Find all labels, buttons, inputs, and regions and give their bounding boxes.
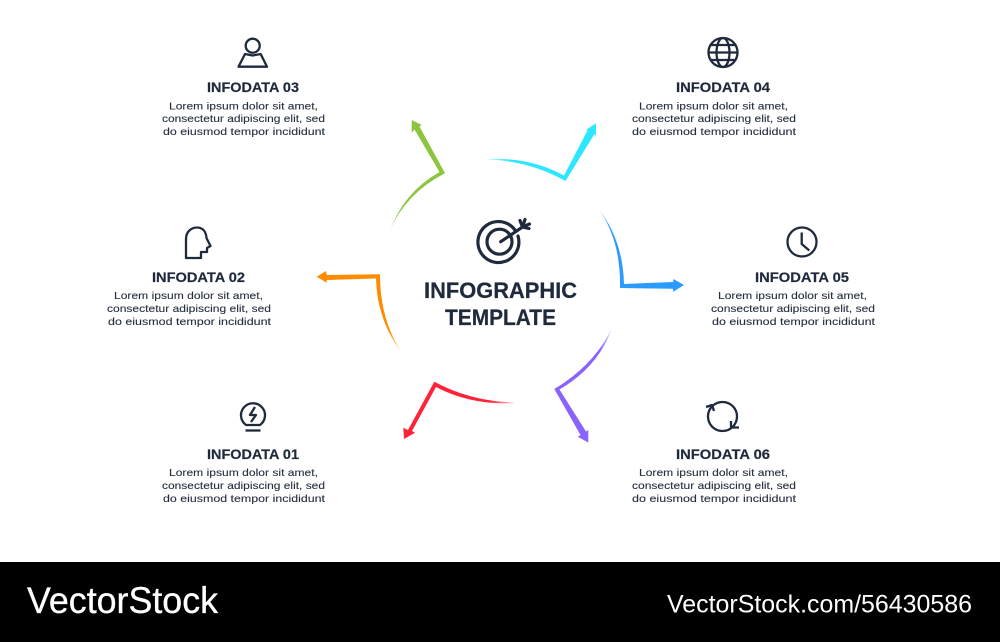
text block: infodata 06: consectetur adipiscing elit, sed <box>632 480 796 492</box>
heading: infodata 04: INFODATA 04 <box>676 80 771 95</box>
icon: clock <box>788 228 816 256</box>
text block: infodata 01 <box>162 467 325 505</box>
panel: infodata 03 <box>162 39 325 138</box>
arrow: purple to Infodata 06 <box>554 329 612 442</box>
heading: infodata 01: INFODATA 01 <box>207 447 300 462</box>
arrow: blue to Infodata 05 <box>598 208 684 292</box>
text block: infodata 04 <box>632 100 796 138</box>
text block: infodata 02: consectetur adipiscing elit, sed <box>107 303 271 315</box>
footer bar with watermark <box>0 562 1000 642</box>
text block: infodata 05: Lorem ipsum dolor sit amet, <box>718 290 867 302</box>
panel: infodata 06 <box>632 402 796 505</box>
footer url text: VectorStock.com/56430586 <box>667 590 972 618</box>
heading: infodata 06: INFODATA 06 <box>676 447 771 462</box>
center: target icon and title <box>424 220 577 330</box>
arrow: red to Infodata 01 <box>403 382 514 439</box>
text block: infodata 02 <box>107 290 271 328</box>
panel: infodata 05 <box>711 228 875 328</box>
heading: infographic template <box>424 278 577 330</box>
text block: infodata 04: do eiusmod tempor incididunt <box>632 126 796 138</box>
text block: infodata 06: do eiusmod tempor incididunt <box>632 493 796 505</box>
icon: person with map <box>238 39 267 67</box>
heading: infodata 03: INFODATA 03 <box>207 80 300 95</box>
text block: infodata 03 <box>162 100 325 138</box>
text block: infodata 01: Lorem ipsum dolor sit amet, <box>169 467 318 479</box>
text block: infodata 02: do eiusmod tempor incididunt <box>108 316 271 328</box>
text block: infodata 03: consectetur adipiscing elit, sed <box>162 113 325 125</box>
text block: infodata 01: do eiusmod tempor incididunt <box>163 493 325 505</box>
icon: light bulb with bolt <box>241 403 265 430</box>
text block: infodata 02: Lorem ipsum dolor sit amet, <box>114 290 263 302</box>
text block: infodata 03: do eiusmod tempor incididunt <box>163 126 325 138</box>
arrow: cyan to Infodata 04 <box>488 123 596 181</box>
panel: infodata 02 <box>107 228 271 328</box>
panel: infodata 04 <box>632 38 796 138</box>
text block: infodata 03: Lorem ipsum dolor sit amet, <box>169 100 318 112</box>
heading: infographic template: TEMPLATE <box>445 305 556 330</box>
panel: infodata 01 <box>162 403 325 505</box>
text block: infodata 05 <box>711 290 875 328</box>
arrow: orange to Infodata 02 <box>317 271 402 352</box>
text block: infodata 04: consectetur adipiscing elit, sed <box>632 113 796 125</box>
text block: infodata 01: consectetur adipiscing elit, sed <box>162 480 325 492</box>
text block: infodata 06 <box>632 467 796 505</box>
heading: infodata 02: INFODATA 02 <box>152 270 245 285</box>
arrow: green to Infodata 03 <box>389 120 445 232</box>
footer logo text: VectorStock <box>27 580 218 621</box>
text block: infodata 04: Lorem ipsum dolor sit amet, <box>639 100 788 112</box>
icon: target with arrow <box>478 220 530 263</box>
heading: infographic template: INFOGRAPHIC <box>424 278 577 303</box>
text block: infodata 05: do eiusmod tempor incididunt <box>712 316 875 328</box>
icon: globe <box>708 38 738 67</box>
heading: infodata 05: INFODATA 05 <box>755 270 850 285</box>
icon: refresh arrows <box>706 402 739 431</box>
icon: head profile <box>186 228 210 258</box>
text block: infodata 06: Lorem ipsum dolor sit amet, <box>639 467 788 479</box>
text block: infodata 05: consectetur adipiscing elit, sed <box>711 303 875 315</box>
